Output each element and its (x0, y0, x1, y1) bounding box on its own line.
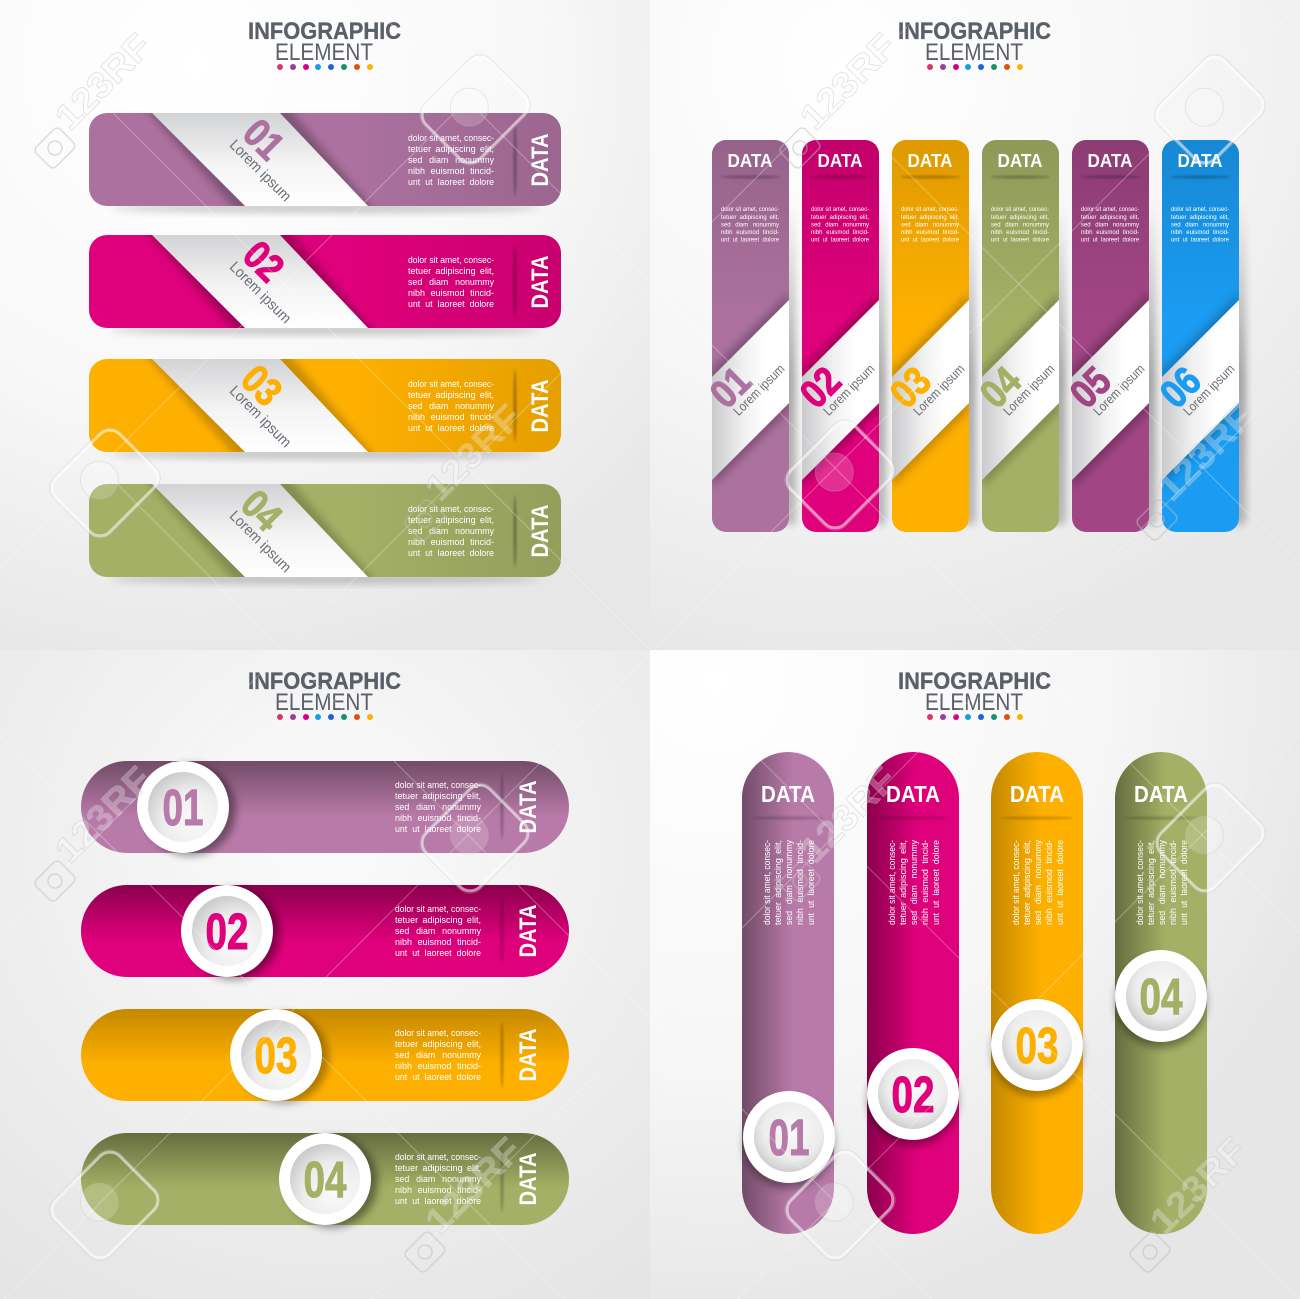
vertical pill 04: DATA (1134, 781, 1188, 807)
banner 02: unt ut laoreet dolore (408, 299, 494, 309)
pill 03: tetuer adipiscing elit, (395, 1039, 481, 1049)
column 05: tetuer adipiscing elit, (1081, 214, 1139, 221)
vertical pill 04: 04 (1140, 968, 1183, 1025)
column 03: tetuer adipiscing elit, (901, 214, 959, 221)
banner 03: nibh euismod tincid- (408, 412, 494, 422)
column 03: DATA (908, 151, 952, 171)
column 04: Lorem ipsum (1000, 361, 1057, 418)
pill 01 (81, 761, 569, 856)
vertical pill 03: dolor sit amet, consec- (1011, 840, 1021, 925)
pill 01: dolor sit amet, consec- (395, 780, 481, 790)
vertical pill 02: unt ut laoreet dolore (931, 840, 941, 925)
banner 03: 03 (232, 357, 290, 415)
column 05: sed diam nonummy (1081, 222, 1140, 228)
column 06: 06 (1152, 359, 1210, 417)
vertical pill 03: nibh euismod tincid- (1044, 840, 1054, 925)
title: INFOGRAPHIC (898, 18, 1051, 45)
column 03 (882, 140, 976, 532)
panel: vertical pills with circles (742, 668, 1207, 1234)
watermark text: 123RF (47, 758, 159, 871)
watermark text: 123RF (47, 25, 159, 138)
vertical pill 01: 01 (768, 1109, 810, 1166)
pill 04: tetuer adipiscing elit, (395, 1163, 481, 1173)
title: INFOGRAPHIC (248, 18, 401, 45)
column 06: unt ut laoreet dolore (1171, 236, 1230, 244)
column 06: DATA (1178, 151, 1222, 171)
pill 03: unt ut laoreet dolore (395, 1072, 481, 1082)
pill 03 (81, 1009, 569, 1104)
column 02: DATA (818, 151, 862, 171)
column 06: sed diam nonummy (1171, 222, 1230, 228)
banner 04 (89, 478, 561, 584)
column 05: unt ut laoreet dolore (1081, 236, 1140, 244)
banner 01: sed diam nonummy (408, 155, 494, 165)
pill 03: DATA (515, 1028, 542, 1082)
banner 01: DATA (527, 134, 554, 186)
pill 01: sed diam nonummy (395, 802, 481, 812)
pill 04: DATA (515, 1152, 542, 1206)
pill 03: dolor sit amet, consec- (395, 1028, 481, 1038)
panel: horizontal ribbon banners (89, 18, 561, 584)
column 04: unt ut laoreet dolore (991, 236, 1050, 244)
banner 01: nibh euismod tincid- (408, 166, 494, 176)
banner 03: dolor sit amet, consec- (408, 379, 494, 389)
vertical pill 01: DATA (761, 781, 815, 807)
banner 02: DATA (527, 256, 554, 308)
column 06: nibh euismod tincid- (1171, 229, 1229, 236)
pill 01: nibh euismod tincid- (395, 813, 481, 823)
column 01: nibh euismod tincid- (721, 229, 779, 236)
pill 04: dolor sit amet, consec- (395, 1152, 481, 1162)
vertical pill 01: sed diam nonummy (784, 840, 794, 925)
banner 04: sed diam nonummy (408, 526, 494, 536)
banner 01: Lorem ipsum (226, 137, 294, 205)
column 05: DATA (1088, 151, 1132, 171)
pill 02: DATA (515, 904, 542, 958)
vertical pill 02: tetuer adipiscing elit, (898, 840, 908, 925)
vertical pill 04 (1115, 752, 1207, 1234)
column 02: sed diam nonummy (811, 222, 870, 228)
pill 04 (81, 1133, 569, 1228)
column 01: DATA (728, 151, 772, 171)
pill 02: dolor sit amet, consec- (395, 904, 481, 914)
banner 02: nibh euismod tincid- (408, 288, 494, 298)
column 05: nibh euismod tincid- (1081, 229, 1139, 236)
pill 04: unt ut laoreet dolore (395, 1196, 481, 1206)
title: ELEMENT (925, 39, 1023, 66)
column 01: Lorem ipsum (730, 361, 787, 418)
column 01: dolor sit amet, consec- (721, 206, 779, 213)
small watermark stamps (33, 126, 1179, 1274)
banner 04: 04 (232, 482, 291, 540)
vertical pill 02 (867, 752, 959, 1234)
banner 02: sed diam nonummy (408, 277, 494, 287)
banner 01: tetuer adipiscing elit, (408, 144, 494, 154)
banner 03: sed diam nonummy (408, 401, 494, 411)
watermark text: 123RF (1149, 396, 1261, 509)
banner 01: dolor sit amet, consec- (408, 133, 494, 143)
column 02: dolor sit amet, consec- (811, 206, 869, 213)
banner 01 (89, 107, 561, 213)
vertical pill 03: tetuer adipiscing elit, (1022, 840, 1032, 925)
banner 03: DATA (527, 380, 554, 432)
column 02: 02 (792, 359, 850, 417)
pill 02: nibh euismod tincid- (395, 937, 481, 947)
vertical pill 04: sed diam nonummy (1157, 840, 1167, 925)
column 06: tetuer adipiscing elit, (1171, 214, 1229, 221)
column 05: 05 (1062, 359, 1120, 417)
banner 04: DATA (527, 504, 554, 558)
pill 02: unt ut laoreet dolore (395, 948, 481, 958)
vertical pill 02: dolor sit amet, consec- (887, 840, 897, 925)
panel: horizontal pills with circles (81, 668, 569, 1228)
panel: vertical ribbon columns (702, 18, 1246, 532)
column 06: dolor sit amet, consec- (1171, 206, 1229, 213)
column 01 (702, 140, 796, 532)
title (248, 668, 401, 720)
pill 01: DATA (515, 780, 542, 834)
banner 03 (89, 353, 561, 459)
pill 02: 02 (206, 903, 248, 960)
column 04: dolor sit amet, consec- (991, 206, 1049, 213)
title: INFOGRAPHIC (248, 668, 401, 695)
column 03: sed diam nonummy (901, 222, 960, 228)
column 02: tetuer adipiscing elit, (811, 214, 869, 221)
column 06: Lorem ipsum (1180, 361, 1237, 418)
pill 04: 04 (304, 1151, 347, 1208)
column 03: nibh euismod tincid- (901, 229, 959, 236)
vertical pill 04: nibh euismod tincid- (1168, 840, 1178, 925)
vertical pill 02: sed diam nonummy (909, 840, 919, 925)
banner 04: tetuer adipiscing elit, (408, 515, 494, 525)
banner 02 (89, 229, 561, 335)
title: ELEMENT (275, 689, 373, 716)
column 04: DATA (998, 151, 1042, 171)
vertical pill 01 (742, 752, 835, 1234)
column 04: tetuer adipiscing elit, (991, 214, 1049, 221)
column 02: unt ut laoreet dolore (811, 236, 870, 244)
column 04 (972, 140, 1066, 532)
vertical pill 02: nibh euismod tincid- (920, 840, 930, 925)
vertical pill 02: DATA (886, 781, 940, 807)
vertical pill 02: 02 (892, 1066, 934, 1123)
column 03: dolor sit amet, consec- (901, 206, 959, 213)
vertical pill 03 (991, 752, 1083, 1234)
watermark text: 123RF (1142, 1129, 1254, 1242)
column 01: 01 (702, 359, 760, 417)
banner 04: nibh euismod tincid- (408, 537, 494, 547)
pill 01: tetuer adipiscing elit, (395, 791, 481, 801)
watermark text: 123RF (792, 758, 904, 871)
column 03: 03 (882, 359, 940, 417)
column 01: sed diam nonummy (721, 222, 780, 228)
watermark text: 123RF (417, 396, 529, 509)
banner 04: unt ut laoreet dolore (408, 548, 494, 558)
column 05 (1062, 140, 1156, 532)
pill 03: sed diam nonummy (395, 1050, 481, 1060)
vertical pill 03: DATA (1010, 781, 1064, 807)
pill 03: 03 (254, 1027, 298, 1084)
column 02: Lorem ipsum (820, 361, 877, 418)
pill 02: tetuer adipiscing elit, (395, 915, 481, 925)
vertical pill 01: tetuer adipiscing elit, (773, 840, 783, 925)
vertical pill 04: dolor sit amet, consec- (1135, 840, 1145, 925)
banner 02: tetuer adipiscing elit, (408, 266, 494, 276)
title (898, 668, 1051, 720)
pill 04: sed diam nonummy (395, 1174, 481, 1184)
title (248, 18, 401, 70)
column 01: unt ut laoreet dolore (721, 236, 780, 244)
pill 02: sed diam nonummy (395, 926, 481, 936)
banner 02: Lorem ipsum (226, 259, 294, 327)
column 04: 04 (972, 358, 1030, 417)
column 02 (792, 140, 886, 532)
vertical pill 04: unt ut laoreet dolore (1179, 840, 1189, 925)
column 04: nibh euismod tincid- (991, 229, 1049, 236)
title: ELEMENT (925, 689, 1023, 716)
pill 03: nibh euismod tincid- (395, 1061, 481, 1071)
vertical pill 04: tetuer adipiscing elit, (1146, 840, 1156, 925)
watermark text: 123RF (792, 25, 904, 138)
banner 03: Lorem ipsum (226, 383, 294, 451)
pill 01: unt ut laoreet dolore (395, 824, 481, 834)
pill 04: nibh euismod tincid- (395, 1185, 481, 1195)
column 04: sed diam nonummy (991, 222, 1050, 228)
column 02: nibh euismod tincid- (811, 229, 869, 236)
banner 03: tetuer adipiscing elit, (408, 390, 494, 400)
title: ELEMENT (275, 39, 373, 66)
banner 02: 02 (234, 233, 292, 291)
column 06 (1152, 140, 1246, 532)
title (898, 18, 1051, 70)
banner 01: 01 (234, 111, 292, 169)
banner 01: unt ut laoreet dolore (408, 177, 494, 187)
banner 04: Lorem ipsum (226, 508, 294, 576)
column 03: Lorem ipsum (910, 361, 967, 418)
watermark text: 123RF (417, 1129, 529, 1242)
banner 04: dolor sit amet, consec- (408, 504, 494, 514)
column 01: tetuer adipiscing elit, (721, 214, 779, 221)
column 05: Lorem ipsum (1090, 361, 1147, 418)
vertical pill 03: sed diam nonummy (1033, 840, 1043, 925)
banner 02: dolor sit amet, consec- (408, 255, 494, 265)
pill 02 (81, 885, 569, 980)
title: INFOGRAPHIC (898, 668, 1051, 695)
vertical pill 03: 03 (1016, 1017, 1058, 1074)
column 05: dolor sit amet, consec- (1081, 206, 1139, 213)
vertical pill 03: unt ut laoreet dolore (1055, 840, 1065, 925)
pill 01: 01 (162, 779, 204, 836)
column 03: unt ut laoreet dolore (901, 236, 960, 244)
vertical pill 01: unt ut laoreet dolore (806, 840, 816, 925)
vertical pill 01: nibh euismod tincid- (795, 840, 805, 925)
vertical pill 01: dolor sit amet, consec- (762, 840, 772, 925)
banner 03: unt ut laoreet dolore (408, 423, 494, 433)
